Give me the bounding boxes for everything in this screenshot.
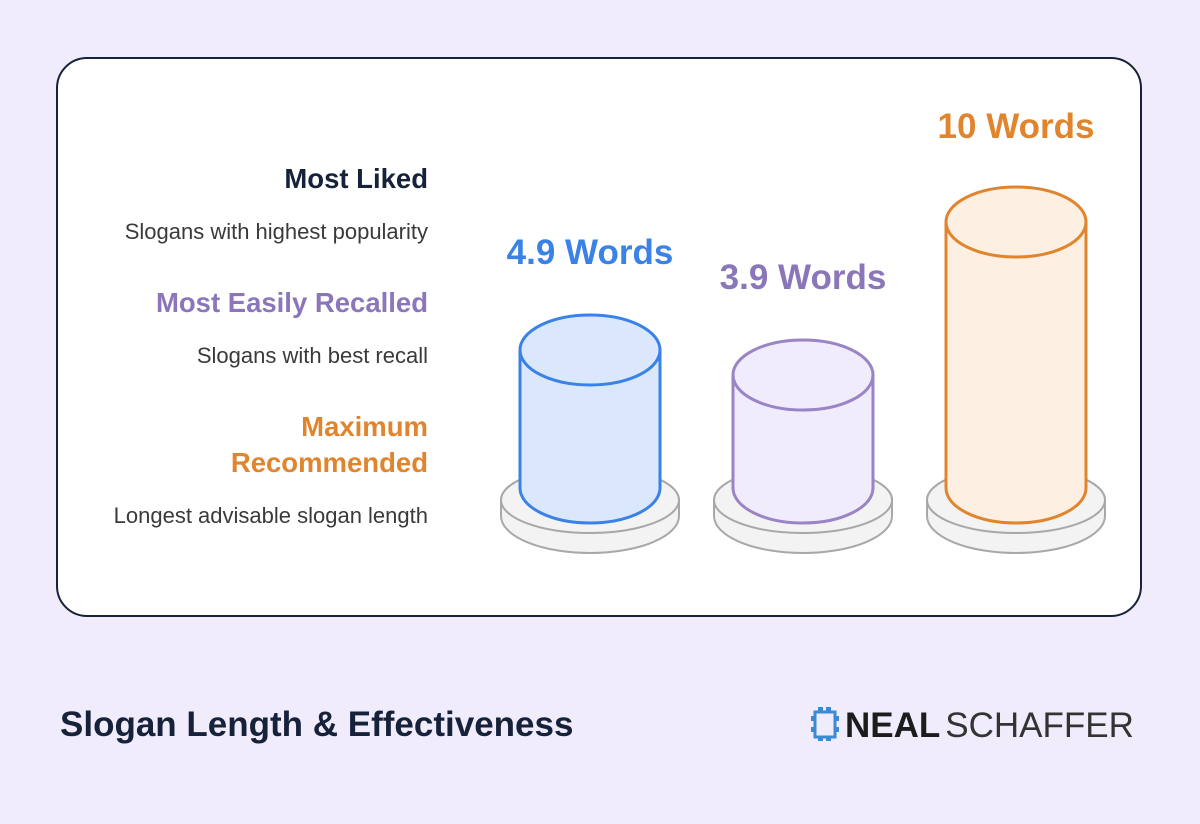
heading: maximum recommended: Maximum	[301, 411, 428, 442]
chart: orange cylinder 10 words: 10 Words	[938, 107, 1094, 146]
title: Slogan Length & Effectiveness	[60, 705, 573, 744]
text: maximum description: Longest advisable slogan length	[114, 503, 428, 528]
text: recall description: Slogans with best recall	[197, 343, 428, 368]
chart: blue cylinder 4.9 words	[501, 233, 679, 553]
panel: main card	[57, 58, 1141, 616]
logo: neal schaffer: NEALSCHAFFER	[845, 706, 1134, 745]
chart: purple cylinder 3.9 words	[714, 258, 892, 553]
text: most liked description: Slogans with highest popularity	[125, 219, 428, 244]
heading: maximum recommended: Recommended	[231, 447, 428, 478]
heading: most easily recalled: Most Easily Recalled	[156, 287, 428, 318]
chart: blue cylinder 4.9 words: 4.9 Words	[507, 233, 673, 272]
icon: logo mark	[811, 707, 839, 741]
chart: purple cylinder 3.9 words: 3.9 Words	[720, 258, 886, 297]
text block: labels	[114, 163, 428, 528]
chart: orange cylinder 10 words	[927, 107, 1105, 553]
heading: most liked: Most Liked	[284, 163, 428, 194]
